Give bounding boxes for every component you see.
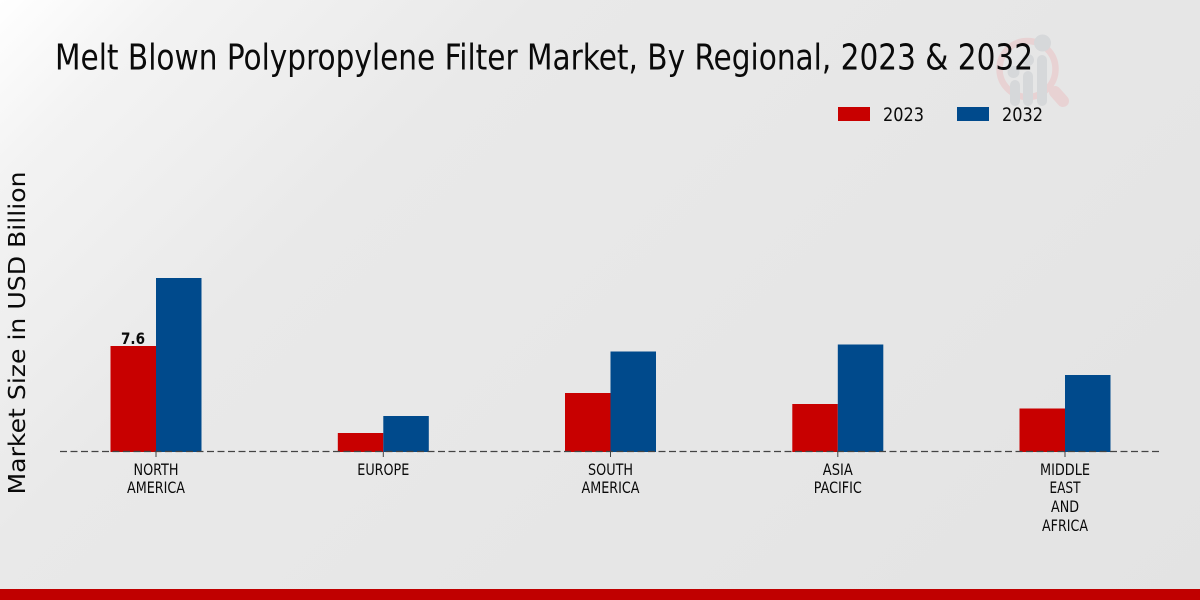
y-axis label: Market Size in USD Billion: [3, 172, 31, 494]
x label: Middle East and Africa: [1040, 460, 1090, 535]
x label: Europe: EUROPE: [357, 460, 409, 479]
legend: 2023: 2023: [883, 104, 924, 126]
x label: South America: AMERICA: [582, 478, 640, 497]
title: Melt Blown Polypropylene Filter Market, By Regional, 2023 & 2032: [55, 38, 1033, 78]
bars: Europe: [338, 416, 429, 452]
footer bar: [0, 589, 1200, 600]
x label: North America: [127, 460, 185, 497]
bars: Asia Pacific: [792, 344, 883, 452]
x label: Asia Pacific: ASIA: [823, 460, 853, 479]
x label: North America: AMERICA: [127, 478, 185, 497]
x label: Asia Pacific: PACIFIC: [814, 478, 862, 497]
x label: Middle East and Africa: MIDDLE: [1040, 460, 1090, 479]
legend: 2023: [838, 104, 924, 126]
x label: Middle East and Africa: AFRICA: [1042, 516, 1088, 535]
x label: North America: NORTH: [134, 460, 178, 479]
x label: Middle East and Africa: EAST: [1050, 478, 1081, 497]
x label: Asia Pacific: [814, 460, 862, 497]
bars: North America: [110, 278, 202, 452]
x-axis baseline: [60, 452, 1160, 457]
legend: 2032: 2032: [1002, 104, 1043, 126]
x label: South America: [582, 460, 640, 497]
icon: watermark magnifier with bars: [1000, 34, 1063, 106]
legend: [838, 104, 1043, 126]
bars: South America: [565, 352, 656, 452]
bars: Middle East and Africa: [1020, 375, 1110, 452]
data label: 7.6: 7.6: [121, 329, 145, 348]
x label: Middle East and Africa: AND: [1051, 497, 1079, 516]
legend: 2032: [957, 104, 1043, 126]
x label: South America: SOUTH: [588, 460, 633, 479]
bar chart: [60, 278, 1160, 457]
